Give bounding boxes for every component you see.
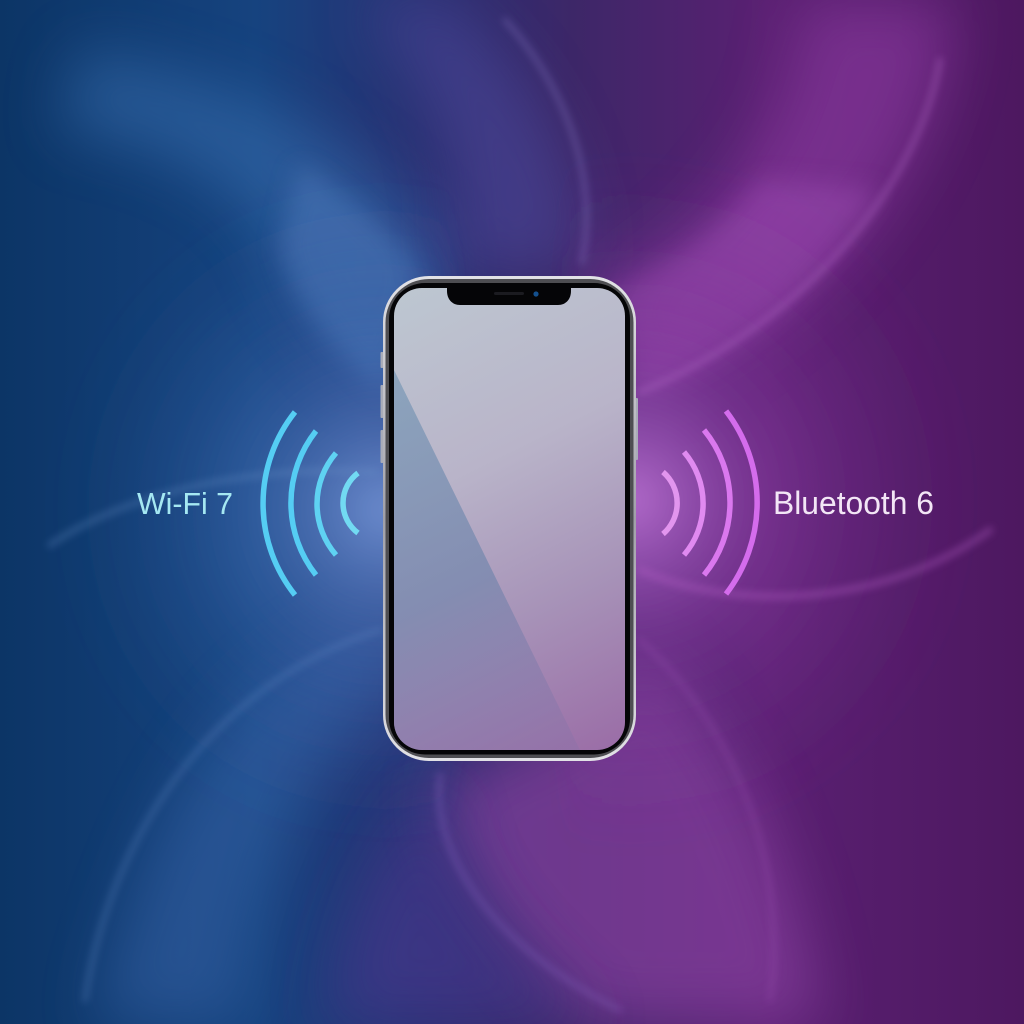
camera: [533, 291, 539, 297]
wave 2: [704, 430, 730, 575]
wave 1: [726, 411, 757, 594]
wave 1: [263, 412, 295, 595]
diagonal light reflection: [394, 370, 580, 750]
wave 3: [684, 452, 703, 555]
smartphone: [380, 276, 638, 761]
wave 2: [291, 431, 316, 575]
wave 4: [663, 472, 677, 534]
centre glow left: [40, 165, 450, 855]
violet swirl lower right: [440, 640, 820, 1024]
wifi signal waves: [263, 412, 358, 595]
notch: [447, 287, 571, 305]
label: Wi-Fi 7: Wi-Fi 7: [137, 486, 233, 521]
violet swirl lower centre: [330, 780, 600, 1024]
wave 4: [343, 473, 358, 533]
violet band near phone: [610, 180, 880, 395]
blue swirl upper left: [60, 50, 438, 395]
violet swirl top centre: [360, 0, 581, 270]
centre glow right: [570, 145, 990, 855]
side buttons: [380, 352, 638, 463]
bluetooth signal waves: [663, 411, 757, 594]
label: Bluetooth 6: Bluetooth 6: [773, 485, 934, 521]
violet swirl top right: [610, 0, 950, 395]
metal frame: [383, 276, 636, 761]
screen: [394, 288, 625, 750]
blue band near phone: [280, 165, 420, 392]
blue swirl lower left: [95, 615, 385, 1024]
speaker: [494, 292, 524, 295]
wave 3: [317, 453, 336, 555]
